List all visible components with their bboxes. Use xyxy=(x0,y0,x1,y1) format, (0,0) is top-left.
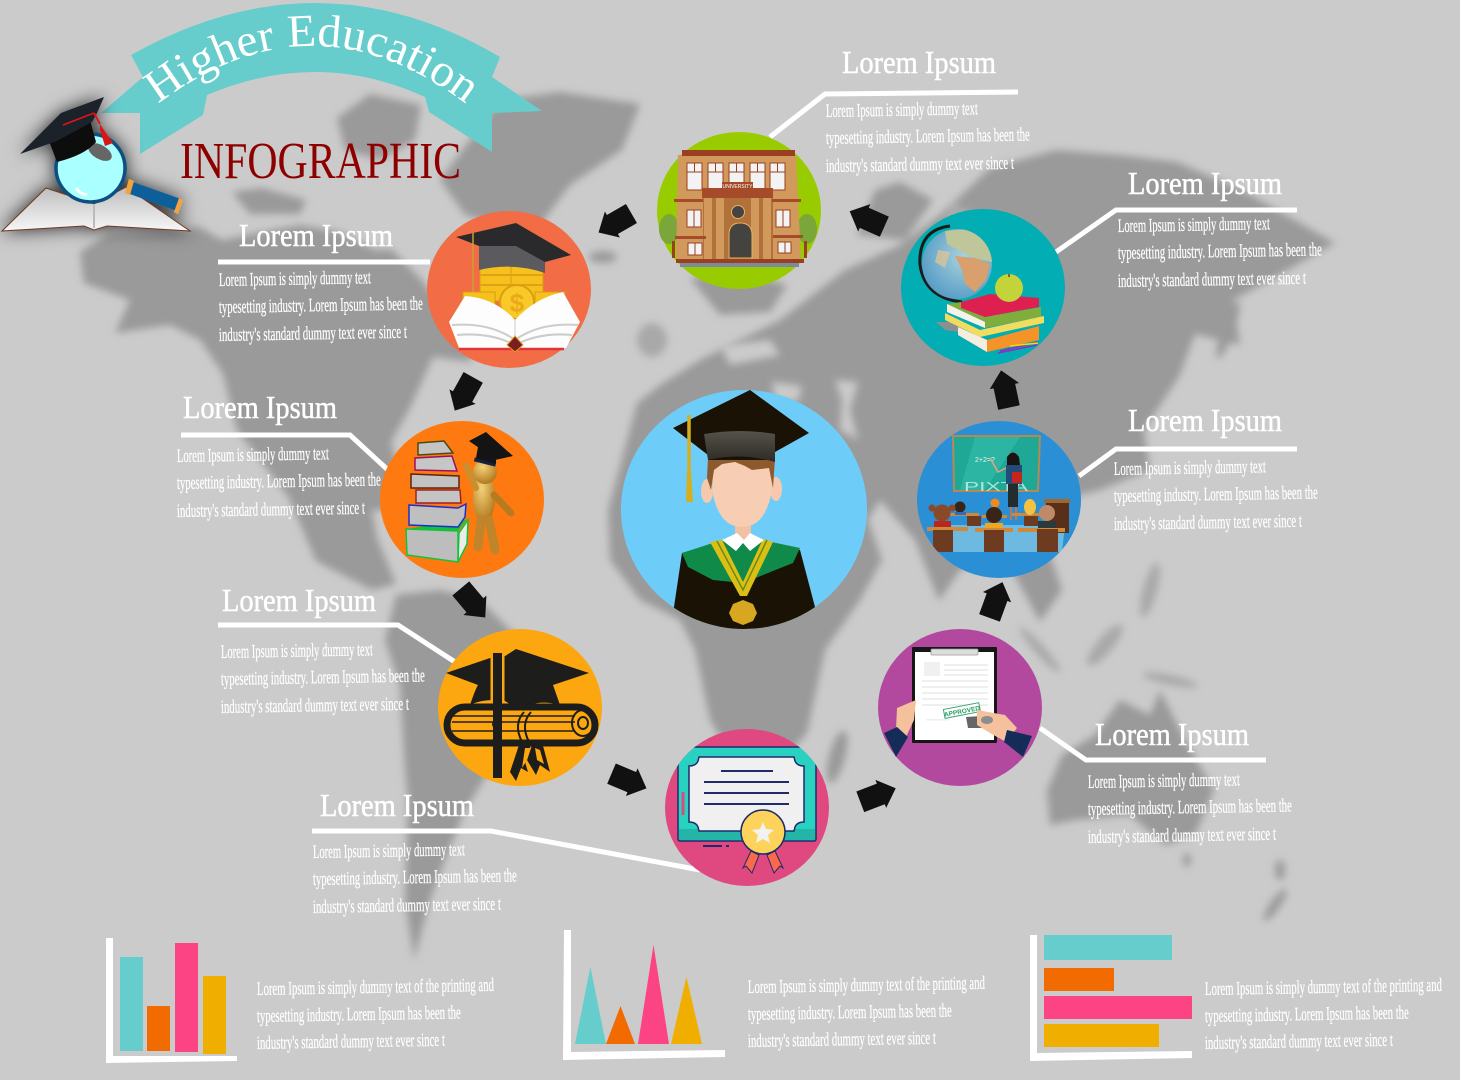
title banner: Higher Education: Higher Education xyxy=(142,15,474,104)
text block: scroll: industry's standard dummy text ever since t xyxy=(221,694,409,718)
text block: approval: Lorem Ipsum xyxy=(1095,716,1249,752)
title: INFOGRAPHIC: INFOGRAPHIC xyxy=(180,133,461,190)
text block: globe: industry's standard dummy text ever since t xyxy=(1118,268,1306,292)
circle: book stack and gold figure xyxy=(380,421,544,578)
circle: scroll and cap xyxy=(438,629,602,786)
tree right xyxy=(797,214,817,258)
text block: top xyxy=(826,44,1030,177)
text block: certificate: typesetting industry. Lorem Ipsum has been the xyxy=(313,865,517,890)
text block: certificate: Lorem Ipsum xyxy=(320,787,474,823)
text block: top: industry's standard dummy text ever since t xyxy=(826,153,1014,177)
text block: certificate: Lorem Ipsum is simply dummy text xyxy=(313,839,465,863)
text block: coins: industry's standard dummy text ever since t xyxy=(219,322,407,346)
circle: university building xyxy=(657,132,821,289)
text block: approval xyxy=(1088,716,1292,848)
text block: classroom: Lorem Ipsum xyxy=(1128,402,1282,438)
text block: scroll: Lorem Ipsum xyxy=(222,582,376,618)
arrow: globe to university xyxy=(844,198,890,240)
text block: top: Lorem Ipsum xyxy=(842,44,996,80)
text: chart two caption: industry's standard dummy text ever since t xyxy=(748,1028,936,1052)
text block: scroll: Lorem Ipsum is simply dummy text xyxy=(221,639,373,663)
world map backdrop xyxy=(80,92,1335,960)
text: chart two caption: typesetting industry. Lorem Ipsum has been the xyxy=(748,1000,952,1025)
circle: classroom: 2+2=? xyxy=(975,457,995,464)
text block: books: industry's standard dummy text ever since t xyxy=(177,498,365,522)
text block: coins: Lorem Ipsum is simply dummy text xyxy=(219,267,371,291)
text block: books: Lorem Ipsum xyxy=(183,389,337,425)
arrow: university to coins xyxy=(591,201,639,245)
text block: coins: Lorem Ipsum xyxy=(239,217,393,253)
stamp: approved: APPROVED xyxy=(944,705,981,719)
tree left xyxy=(659,214,679,258)
connector lines xyxy=(181,92,1297,870)
circle: certificate xyxy=(665,729,829,886)
text block: top: typesetting industry. Lorem Ipsum has been the xyxy=(826,124,1030,149)
arrow: books to scroll xyxy=(449,579,497,627)
arrow: classroom to globe xyxy=(986,367,1024,411)
arrow: coins to books xyxy=(442,370,486,418)
text block: books xyxy=(177,389,381,522)
text: chart two caption xyxy=(748,973,985,1052)
center circle: graduate xyxy=(621,390,867,640)
text block: classroom: Lorem Ipsum is simply dummy text xyxy=(1114,456,1266,480)
text: chart one caption: typesetting industry. Lorem Ipsum has been the xyxy=(257,1002,461,1027)
triangle chart xyxy=(563,930,725,1060)
bar chart: vertical xyxy=(106,938,237,1063)
text block: coins: typesetting industry. Lorem Ipsum has been the xyxy=(219,293,423,318)
bar chart: horizontal xyxy=(1030,935,1192,1061)
text block: books: typesetting industry. Lorem Ipsum has been the xyxy=(177,469,381,494)
text block: globe: Lorem Ipsum xyxy=(1128,165,1282,201)
text block: classroom xyxy=(1114,402,1318,535)
text: chart one caption: industry's standard dummy text ever since t xyxy=(257,1030,445,1054)
text: chart three caption xyxy=(1205,975,1442,1054)
text block: classroom: industry's standard dummy text ever since t xyxy=(1114,511,1302,535)
text: chart one caption xyxy=(257,975,494,1054)
text block: globe: Lorem Ipsum is simply dummy text xyxy=(1118,213,1270,237)
circle: classroom: PIXTA xyxy=(964,479,1029,494)
circle: classroom xyxy=(917,421,1081,578)
text block: scroll xyxy=(221,582,425,718)
text: chart two caption: Lorem Ipsum is simply dummy text of the printing and xyxy=(748,973,985,998)
text block: approval: typesetting industry. Lorem Ipsum has been the xyxy=(1088,795,1292,820)
arrow: scroll to certificate xyxy=(606,760,652,802)
text block: coins xyxy=(219,217,423,346)
text block: approval: Lorem Ipsum is simply dummy text xyxy=(1088,769,1240,793)
text block: approval: industry's standard dummy text ever since t xyxy=(1088,824,1276,848)
text block: certificate xyxy=(313,787,517,918)
arrow: certificate to clipboard xyxy=(855,774,901,816)
circle: coins and open book xyxy=(427,211,591,368)
title banner: Higher Education xyxy=(101,3,542,154)
text block: scroll: typesetting industry. Lorem Ipsum has been the xyxy=(221,665,425,690)
text block: books: Lorem Ipsum is simply dummy text xyxy=(177,443,329,467)
circle: coins and open book: $ xyxy=(510,288,525,318)
text block: top: Lorem Ipsum is simply dummy text xyxy=(826,98,978,122)
text: chart one caption: Lorem Ipsum is simply dummy text of the printing and xyxy=(257,975,494,1000)
logo: book, magnifier and cap xyxy=(2,97,190,231)
text block: certificate: industry's standard dummy text ever since t xyxy=(313,894,501,918)
circle: globe and books xyxy=(901,209,1065,366)
circle: university building: UNIVERSITY xyxy=(722,184,753,190)
arrow: clipboard to classroom xyxy=(975,577,1017,623)
text block: globe xyxy=(1118,165,1322,292)
circle: approved clipboard xyxy=(878,629,1042,786)
